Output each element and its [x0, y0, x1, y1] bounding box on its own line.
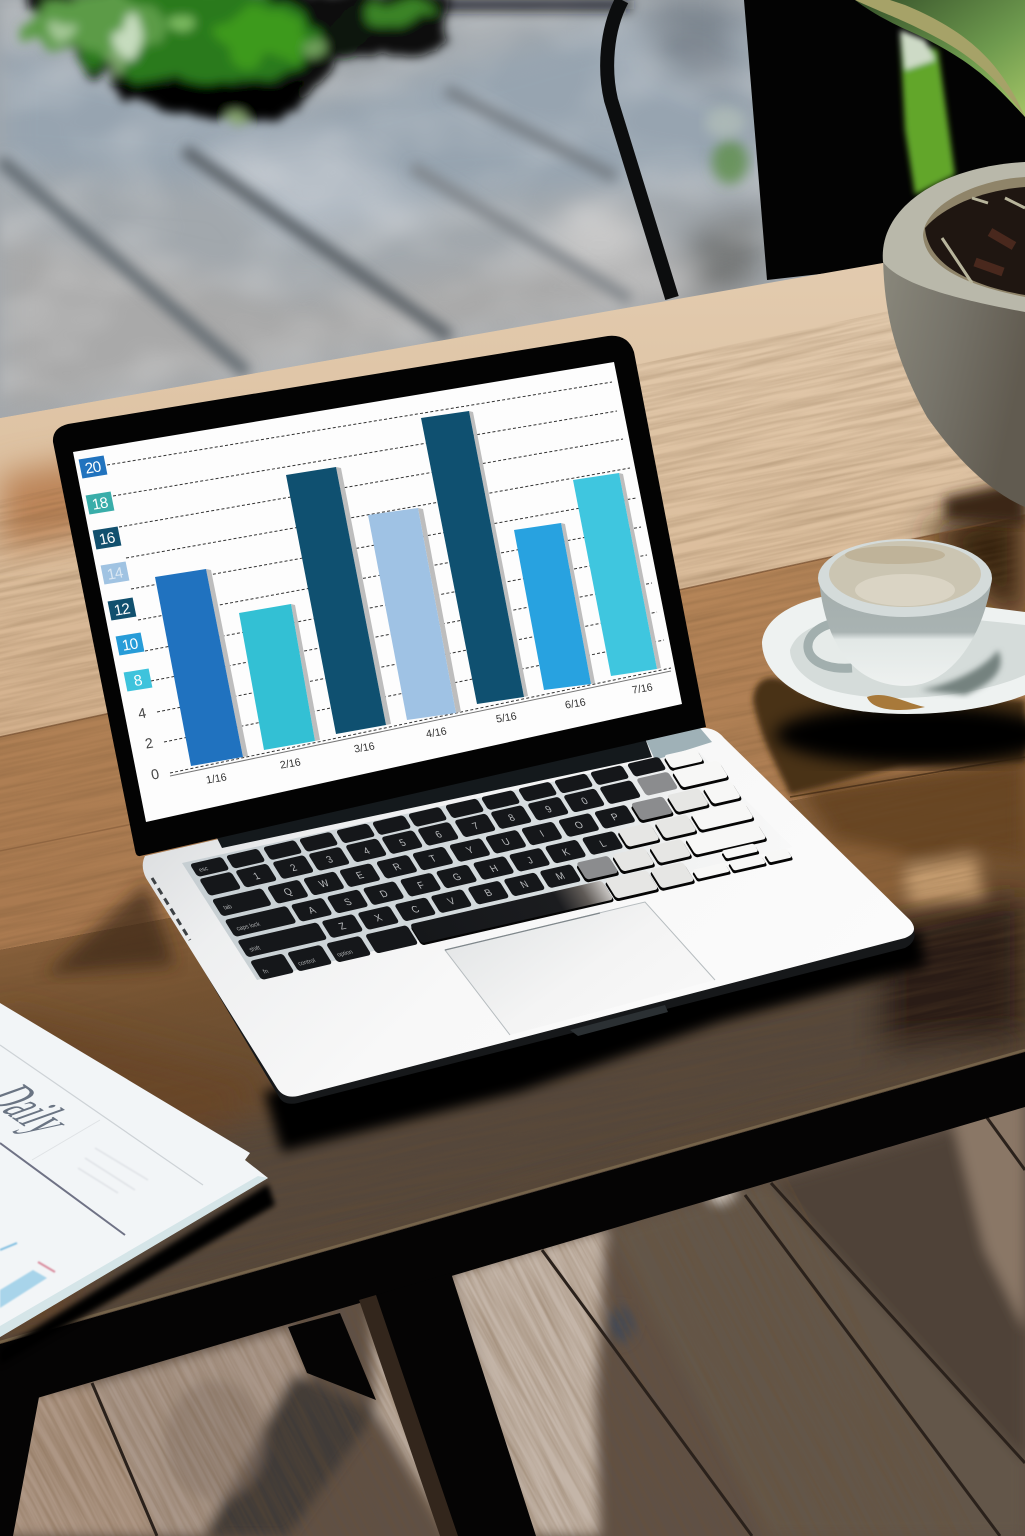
floor plank gaps — [92, 1115, 1025, 1536]
x axis labels: 6/16 — [564, 697, 587, 712]
number row: 3 — [324, 854, 336, 866]
shadow on saucer — [920, 650, 1001, 695]
deck plank gaps — [0, 0, 630, 373]
space bar row: fn — [262, 969, 270, 975]
floor below the table — [0, 1080, 1025, 1536]
trackpad — [445, 902, 715, 1035]
laptop hinge — [213, 738, 652, 848]
floor wood grain — [0, 1107, 1025, 1536]
home row: A — [306, 905, 319, 917]
bar 3/16 — [286, 467, 391, 734]
chart gridlines — [107, 382, 671, 773]
newspaper rules — [0, 1045, 203, 1185]
foliage behind the pot — [900, 30, 955, 195]
qwerty row: W — [317, 878, 332, 890]
home row: D — [378, 889, 391, 900]
qwerty row: tab — [223, 904, 234, 911]
qwerty row: U — [500, 837, 513, 848]
y axis labels: 16 — [98, 529, 117, 549]
number row: 0 — [579, 796, 591, 807]
x axis labels — [205, 682, 654, 787]
blurred sprig near the pillar — [705, 106, 748, 184]
y axis labels: 2 — [144, 736, 155, 753]
table wood grain — [0, 312, 1024, 1037]
bottom letter row: shift — [249, 946, 262, 953]
potted plant foliage, top left — [20, 0, 445, 131]
bottom letter row: Z — [337, 921, 349, 932]
pot opening — [923, 177, 1025, 297]
y axis labels: 0 — [150, 767, 161, 784]
bottom letter row: V — [446, 896, 458, 908]
number row: 1 — [251, 871, 263, 882]
mottled light on the deck — [0, 0, 770, 430]
number row: 6 — [433, 829, 445, 841]
front notch — [570, 1005, 668, 1036]
qwerty row: E — [354, 870, 367, 882]
newspaper — [0, 1003, 275, 1365]
qwerty row: T — [428, 854, 439, 865]
newspaper small print — [78, 1148, 148, 1193]
qwerty row: O — [573, 820, 586, 832]
home row: L — [598, 839, 609, 850]
y axis labels: 10 — [121, 635, 140, 655]
dark pillar — [744, 0, 900, 280]
number row: 5 — [397, 838, 409, 849]
bottom letter row: C — [409, 904, 422, 916]
far dark backdrop — [895, 0, 1025, 270]
x axis labels: 4/16 — [425, 726, 448, 741]
y axis labels: 12 — [113, 600, 132, 620]
home row: F — [416, 880, 427, 892]
home row: G — [451, 872, 464, 884]
cup handle — [808, 622, 852, 668]
bar chart — [155, 411, 661, 766]
space bar row: control — [297, 958, 317, 967]
bar 4/16 — [368, 508, 461, 720]
saucer — [762, 592, 1025, 714]
saucer shadow — [753, 678, 1025, 795]
background: blurred deck, plants and chair — [0, 0, 1025, 440]
bar 1/16 — [155, 569, 248, 766]
laptop lid bezel — [53, 336, 706, 856]
cup body — [819, 578, 992, 686]
qwerty row: Q — [282, 887, 295, 898]
x axis labels: 3/16 — [353, 741, 376, 756]
home row: K — [560, 847, 573, 858]
home row: S — [342, 897, 355, 908]
plant pot — [883, 162, 1025, 525]
saucer well — [790, 616, 1025, 698]
coffee cup and saucer — [753, 539, 1025, 795]
cup rim — [818, 539, 992, 617]
home row: H — [488, 864, 501, 875]
table underside and front edge — [0, 1052, 1025, 1409]
newspaper chart — [0, 1243, 55, 1308]
laptop base — [143, 728, 914, 1097]
number row: 8 — [506, 813, 518, 824]
coffee stain — [867, 695, 925, 710]
qwerty row: P — [609, 812, 622, 823]
bottom letter row — [237, 822, 768, 960]
newspaper shadow — [0, 1184, 275, 1365]
chart baseline — [170, 671, 671, 776]
space bar row — [249, 837, 794, 982]
bottom letter row: M — [554, 871, 568, 883]
pot body — [883, 250, 1025, 507]
x axis labels: 1/16 — [205, 772, 228, 787]
laptop screen — [73, 362, 682, 822]
x axis labels: 2/16 — [279, 757, 302, 772]
number row: 7 — [470, 821, 482, 832]
space bar row: option — [336, 950, 355, 958]
y axis labels: 4 — [137, 706, 148, 723]
bar 2/16 — [239, 604, 320, 750]
side ports — [152, 878, 190, 940]
y axis labels — [79, 456, 161, 784]
y axis labels: 14 — [106, 564, 125, 584]
function row — [190, 748, 705, 880]
keyboard well — [182, 750, 792, 980]
number row: 4 — [361, 846, 373, 857]
qwerty row: I — [538, 829, 547, 840]
function row: esc — [198, 866, 210, 874]
x axis labels: 7/16 — [631, 682, 654, 697]
table top — [0, 238, 1025, 1344]
laptop base front edge — [150, 830, 915, 1104]
home row — [224, 801, 755, 940]
bar 7/16 — [573, 473, 661, 676]
pot shadow — [945, 480, 1025, 525]
laptop — [53, 336, 915, 1104]
home row: J — [525, 856, 536, 867]
keyboard — [190, 742, 794, 982]
qwerty row: R — [391, 862, 404, 873]
shadow under the laptop — [45, 882, 925, 1152]
bar 5/16 — [421, 411, 528, 704]
chair leg — [607, 0, 672, 298]
plant leaf — [855, 0, 1025, 117]
y axis labels: 20 — [84, 458, 103, 478]
screen reflection on the base — [645, 728, 712, 760]
home row: caps lock — [236, 922, 263, 932]
number row: 2 — [288, 863, 300, 874]
bar 6/16 — [514, 523, 595, 690]
table legs — [0, 1273, 536, 1536]
number row — [199, 760, 730, 898]
bottom letter row: B — [483, 888, 495, 899]
bottom letter row: X — [373, 913, 385, 924]
bottom letter row: N — [518, 879, 531, 891]
x axis labels: 5/16 — [495, 711, 518, 726]
qwerty row: Y — [464, 845, 477, 856]
y axis labels: 8 — [132, 672, 144, 690]
qwerty row — [212, 781, 743, 919]
pot soil — [925, 187, 1025, 295]
cup interior — [829, 541, 981, 607]
y axis labels: 18 — [91, 494, 110, 514]
pot rim — [883, 162, 1025, 312]
number row: 9 — [543, 804, 555, 816]
